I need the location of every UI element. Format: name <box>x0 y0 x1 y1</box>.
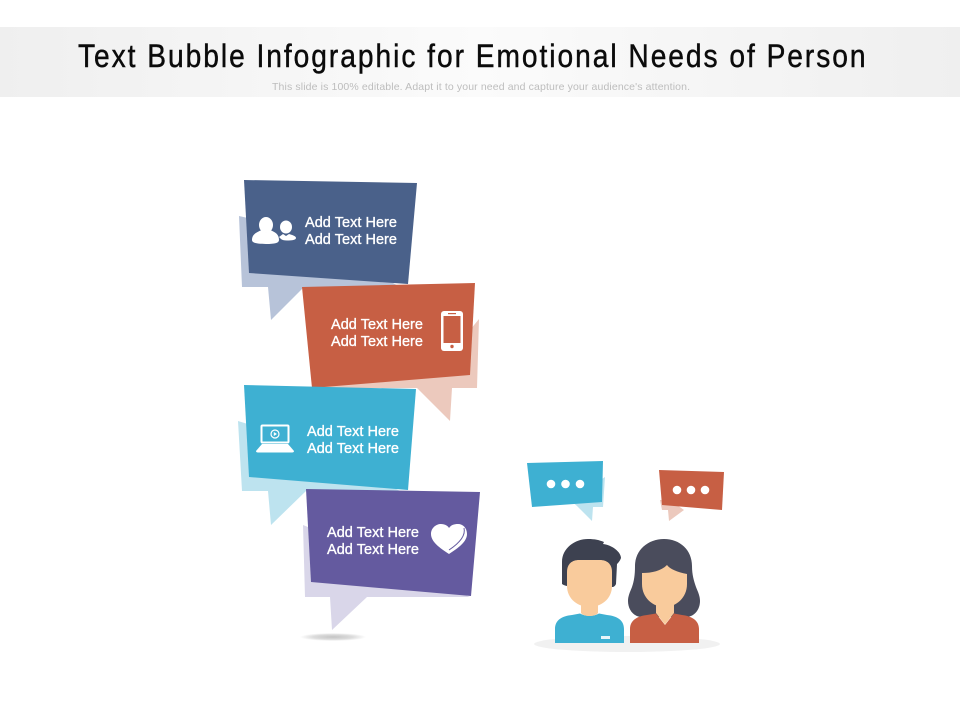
orange bubble text: Add Text Here <box>331 334 423 350</box>
orange chat tail <box>660 500 684 521</box>
blue bubble text <box>305 215 397 248</box>
cyan bubble text <box>307 424 399 457</box>
woman hair <box>628 539 700 617</box>
orange bubble shadow tail <box>312 319 479 421</box>
small orange chat bubble <box>659 470 724 521</box>
orange chat dots <box>673 486 709 494</box>
orange bubble text: Add Text Here <box>331 317 423 333</box>
header band <box>0 27 960 97</box>
man hair <box>562 539 621 587</box>
purple bubble text: Add Text Here <box>327 542 419 558</box>
purple bubble text: Add Text Here <box>327 525 419 541</box>
purple bubble text <box>327 525 419 558</box>
blue bubble text: Add Text Here <box>305 232 397 248</box>
woman face <box>642 565 687 607</box>
panel: purple speech bubble <box>303 489 480 630</box>
title: Text Bubble Infographic for Emotional Needs of Person <box>78 39 866 74</box>
man face <box>567 560 612 607</box>
blue bubble text: Add Text Here <box>305 215 397 231</box>
man pocket <box>601 636 610 639</box>
ground ellipse <box>534 636 720 652</box>
woman figure <box>628 539 700 643</box>
purple bubble body <box>306 489 480 596</box>
cyan chat dots <box>547 480 584 488</box>
man neck <box>581 598 598 616</box>
man torso <box>555 614 624 643</box>
icon: heart <box>431 524 467 554</box>
panel: blue speech bubble <box>239 180 417 320</box>
cyan bubble text: Add Text Here <box>307 424 399 440</box>
cyan bubble body <box>244 385 416 490</box>
cyan bubble text: Add Text Here <box>307 441 399 457</box>
blue bubble shadow tail <box>239 216 400 320</box>
panel: orange speech bubble <box>302 283 479 421</box>
stack ground shadow <box>300 633 366 641</box>
subtitle: This slide is 100% editable. Adapt it to your need and capture your audience's attention. <box>272 81 690 93</box>
orange bubble text <box>331 317 423 350</box>
panel: cyan speech bubble <box>238 385 416 525</box>
cyan chat tail <box>570 477 605 521</box>
purple bubble shadow tail <box>303 525 470 630</box>
orange chat body <box>659 470 724 510</box>
blue bubble body <box>244 180 417 284</box>
cyan bubble shadow tail <box>238 421 400 525</box>
cyan chat body <box>527 461 603 507</box>
small cyan chat bubble <box>527 461 605 521</box>
icon: smartphone <box>441 311 463 351</box>
icon: laptop with play button <box>256 426 294 452</box>
woman torso <box>630 614 699 643</box>
man figure <box>555 539 624 643</box>
icon: two people <box>252 217 296 244</box>
orange bubble body <box>302 283 475 388</box>
woman neck <box>656 600 674 624</box>
